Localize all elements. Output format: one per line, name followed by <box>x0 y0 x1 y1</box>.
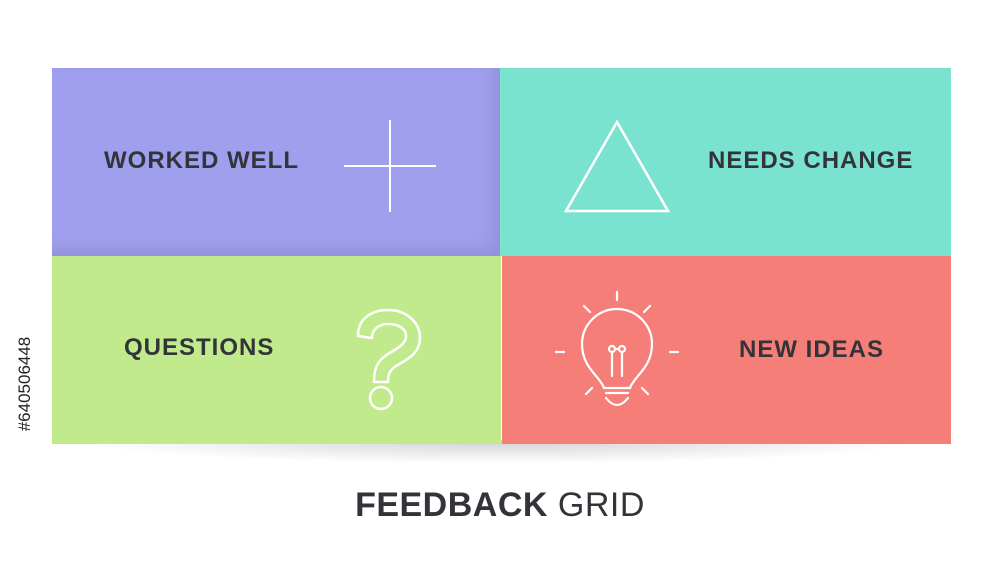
icon: light bulb <box>555 290 679 406</box>
panel: worked well <box>52 68 501 256</box>
panel: new ideas <box>502 256 951 444</box>
side id text: #640506448 <box>15 337 34 431</box>
panel: needs change <box>500 68 951 256</box>
shadow under grid <box>70 440 930 464</box>
heading: needs change: NEEDS CHANGE <box>708 147 913 174</box>
icon: triangle <box>564 120 670 212</box>
heading: questions: QUESTIONS <box>124 334 274 361</box>
icon: question mark <box>356 308 422 410</box>
heading: worked well: WORKED WELL <box>104 147 299 174</box>
panel: questions <box>52 256 501 444</box>
title: FEEDBACK GRID <box>355 486 645 524</box>
icon: plus <box>344 120 436 212</box>
heading: new ideas: NEW IDEAS <box>739 336 884 363</box>
